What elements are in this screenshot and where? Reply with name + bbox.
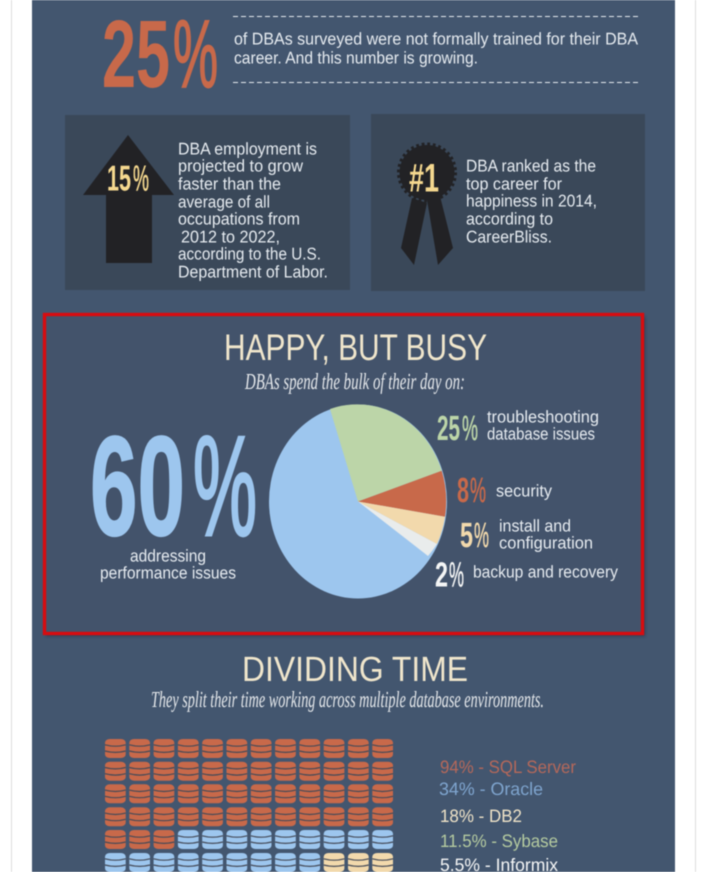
panel: happy but busy xyxy=(44,314,645,636)
legend: 25% troubleshooting: database issues xyxy=(487,424,595,443)
career text xyxy=(466,156,597,246)
legend: 2% backup and recovery: backup and recovery xyxy=(473,562,618,581)
panel: top career xyxy=(371,114,645,291)
career text: according to xyxy=(466,209,553,228)
subheading: DBAs spend the bulk of their day on: xyxy=(244,369,465,394)
legend: 8% security: % xyxy=(470,471,486,510)
legend: 2% backup and recovery: 2 xyxy=(435,556,448,594)
big number 60%: 60 xyxy=(90,407,185,566)
legend: 25% troubleshooting: % xyxy=(462,409,478,448)
legend: 8% security xyxy=(457,471,552,510)
panel: employment growth xyxy=(65,115,350,290)
icon: ribbon badge xyxy=(399,144,455,265)
database share legend: 94% - SQL Server xyxy=(440,757,576,777)
career text: DBA ranked as the xyxy=(466,156,596,175)
legend: 5% install and configuration: install and xyxy=(499,516,571,535)
employment text: DBA employment is xyxy=(178,139,317,158)
stat description: of DBAs surveyed were not formally trained for their DBA xyxy=(234,29,639,48)
database share legend: 18% - DB2 xyxy=(440,806,522,826)
employment text: projected to grow xyxy=(178,156,304,175)
employment text: according to the U.S. xyxy=(178,244,321,263)
legend: 5% install and configuration: 5 xyxy=(460,516,473,555)
stat description xyxy=(234,29,639,67)
employment text xyxy=(178,139,328,281)
legend: 5% install and configuration xyxy=(460,516,593,555)
legend: 5% install and configuration: % xyxy=(474,516,489,555)
legend: 5% install and configuration: configuration xyxy=(499,533,593,552)
database icon grid xyxy=(105,739,393,872)
employment text: average of all xyxy=(178,192,270,211)
arrow label 15%: 15 xyxy=(107,158,131,198)
legend: 8% security: security xyxy=(496,481,552,500)
red highlight frame xyxy=(44,314,642,634)
badge label #1: #1 xyxy=(409,156,439,200)
icon: up arrow xyxy=(83,135,174,263)
career text: top career for xyxy=(466,174,562,193)
legend: 25% troubleshooting: troubleshooting xyxy=(487,407,599,426)
employment text: 2012 to 2022, xyxy=(181,227,280,246)
legend: 8% security: 8 xyxy=(457,471,469,510)
career text: CareerBliss. xyxy=(466,227,552,246)
60% caption: addressing xyxy=(130,546,206,565)
big number 25%: % xyxy=(173,1,218,108)
60% caption xyxy=(100,546,236,582)
panel: employment growth: % xyxy=(133,158,149,198)
60% caption: performance issues xyxy=(100,563,236,582)
big number 25%: 25 xyxy=(102,1,170,108)
employment text: Department of Labor. xyxy=(178,262,328,281)
legend: 25% troubleshooting xyxy=(437,407,599,448)
career text: happiness in 2014, xyxy=(466,191,597,210)
pie chart xyxy=(269,404,447,598)
database share legend xyxy=(439,757,576,872)
heading: HAPPY, BUT BUSY xyxy=(224,327,487,368)
big number 60%: % xyxy=(193,407,257,566)
legend: 2% backup and recovery: % xyxy=(449,556,464,594)
database share legend: 11.5% - Sybase xyxy=(440,831,558,851)
legend: 25% troubleshooting: 25 xyxy=(437,409,460,448)
stat: 25% not formally trained xyxy=(102,1,641,108)
employment text: occupations from xyxy=(178,209,300,228)
heading: dividing time: DIVIDING TIME xyxy=(242,650,468,689)
stat description: career. And this number is growing. xyxy=(234,48,478,67)
employment text: faster than the xyxy=(178,174,281,193)
legend: 2% backup and recovery xyxy=(435,556,618,594)
database share legend: 34% - Oracle xyxy=(439,779,543,799)
